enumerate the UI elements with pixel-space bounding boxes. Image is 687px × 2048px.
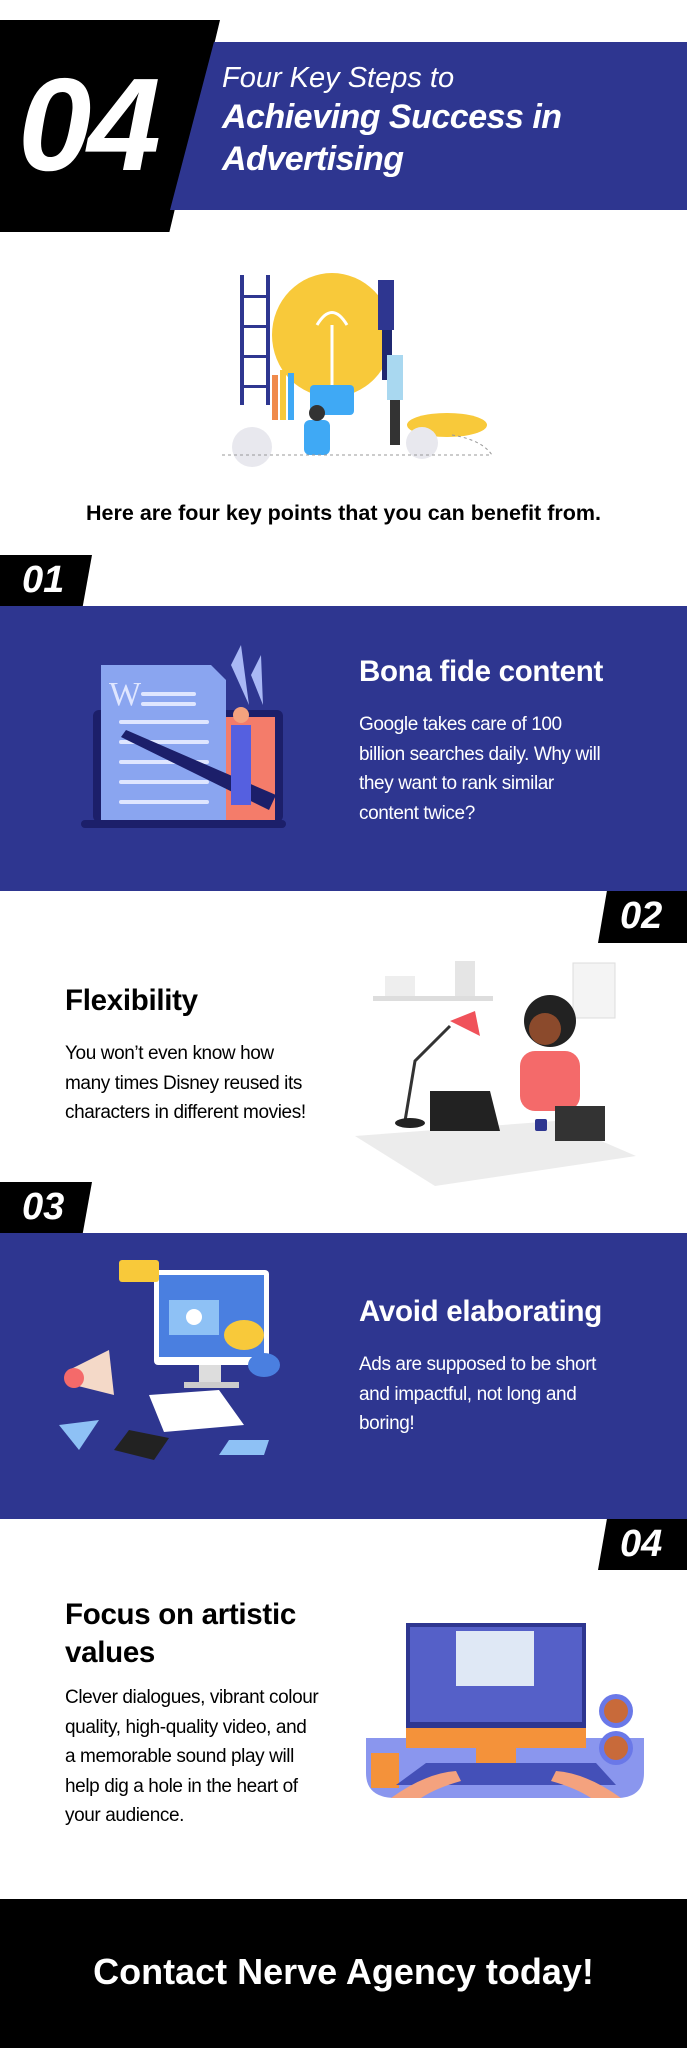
body text <box>359 714 600 824</box>
footer call to action <box>0 1899 687 2048</box>
tag 04 <box>598 1519 687 1570</box>
hero illustration: lightbulb team <box>222 273 492 467</box>
illustration: video editing workstation <box>366 1623 644 1798</box>
big number 04: 04 <box>18 51 157 198</box>
heading: Avoid elaborating <box>359 1295 602 1328</box>
title text: Four Key Steps to <box>222 62 454 94</box>
panel 2: flexibility <box>65 961 636 1186</box>
subtitle: Here are four key points that you can benefit from. <box>86 501 601 525</box>
tag 02: 02 <box>620 895 662 937</box>
illustration: document and pencil: W <box>109 676 142 713</box>
heading: Bona fide content <box>359 655 603 688</box>
tag 01: 01 <box>22 559 64 601</box>
body text: your audience. <box>65 1805 184 1826</box>
body text: Clever dialogues, vibrant colour <box>65 1687 318 1708</box>
body text: content twice? <box>359 802 475 824</box>
body text: billion searches daily. Why will <box>359 744 600 764</box>
body text: Ads are supposed to be short <box>359 1354 596 1375</box>
panel 3: avoid elaborating <box>0 1233 687 1519</box>
panel 4: focus on artistic values <box>65 1598 644 1826</box>
panel 1: bona fide content <box>0 606 687 891</box>
body text: many times Disney reused its <box>65 1072 302 1094</box>
tag 03 <box>0 1182 92 1233</box>
body text: help dig a hole in the heart of <box>65 1776 298 1796</box>
illustration: desktop marketing <box>59 1260 280 1460</box>
body text <box>65 1687 318 1826</box>
tag 02 <box>598 891 687 943</box>
body text: boring! <box>359 1413 414 1434</box>
footer text: Contact Nerve Agency today! <box>93 1951 594 1992</box>
body text: quality, high-quality video, and <box>65 1716 306 1738</box>
body text: Google takes care of 100 <box>359 714 562 735</box>
tag 04: 04 <box>620 1523 662 1565</box>
header: black number block <box>0 20 220 232</box>
title text <box>221 66 561 177</box>
heading: Focus on artistic <box>65 1598 296 1631</box>
body text: You won’t even know how <box>65 1043 274 1064</box>
title text: Advertising <box>222 140 404 178</box>
header: blue title band <box>170 42 687 210</box>
tag 03: 03 <box>22 1186 64 1228</box>
body text <box>359 1354 596 1434</box>
body text: and impactful, not long and <box>359 1384 576 1404</box>
heading: Flexibility <box>65 984 198 1017</box>
body text: they want to rank similar <box>359 773 554 794</box>
illustration: document and pencil <box>81 645 286 828</box>
heading <box>65 1598 296 1669</box>
body text: characters in different movies! <box>65 1102 306 1123</box>
body text <box>65 1043 306 1123</box>
illustration: woman at desk <box>356 961 636 1186</box>
heading: values <box>65 1636 155 1669</box>
title text: Achieving Success in <box>222 98 562 136</box>
tag 01 <box>0 555 92 606</box>
body text: a memorable sound play will <box>65 1746 294 1767</box>
